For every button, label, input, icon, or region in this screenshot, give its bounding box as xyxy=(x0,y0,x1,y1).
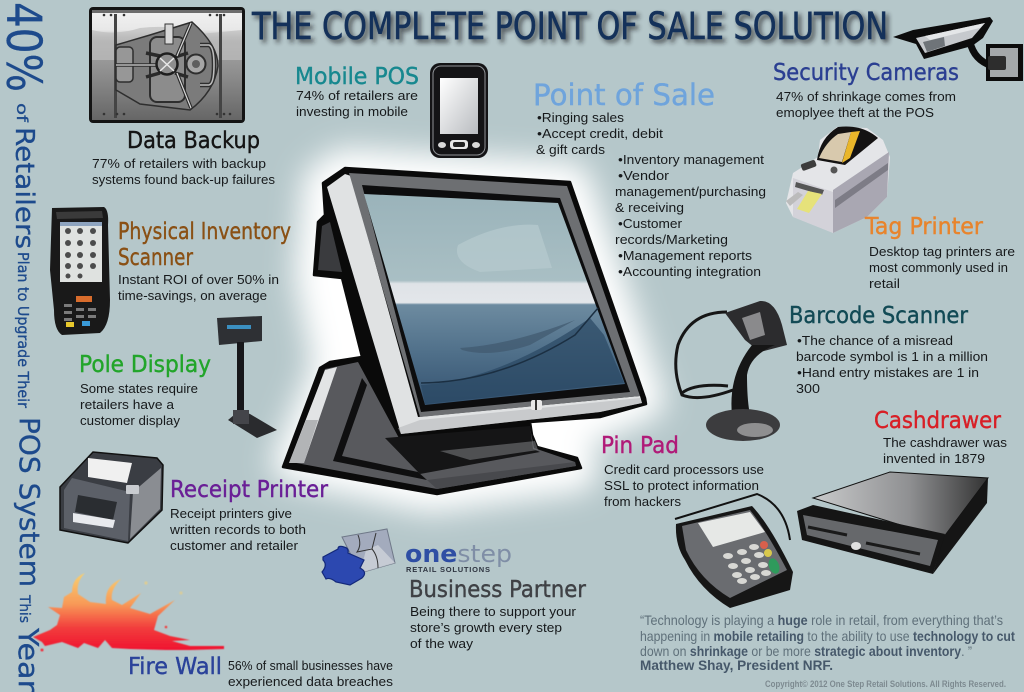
icon: bank vault xyxy=(89,7,245,123)
block: data backup: Data Backup xyxy=(127,128,260,154)
stand xyxy=(291,362,576,489)
block: tag printer: most commonly used in xyxy=(869,260,1008,275)
block: point of sale: Point of Sale xyxy=(533,78,715,112)
vertical headline xyxy=(0,2,51,692)
block: receipt printer: written records to both xyxy=(169,522,306,537)
block: pole display xyxy=(79,352,211,428)
block: data backup: 77% of retailers with backup xyxy=(92,156,266,171)
monitor glow xyxy=(292,168,645,493)
block: business partner: Business Partner xyxy=(409,577,586,603)
block: tag printer: Desktop tag printers are xyxy=(869,244,1015,259)
logo: one step puzzle: onestep xyxy=(405,540,512,568)
block: point of sale: •Customer xyxy=(618,216,683,231)
block: security cameras: 47% of shrinkage comes from xyxy=(776,89,956,104)
quote: Matthew Shay, President NRF. xyxy=(640,657,833,673)
block: point of sale: •Management reports xyxy=(618,248,753,263)
block: point of sale: •Vendor xyxy=(618,168,670,183)
block: barcode scanner xyxy=(789,303,988,396)
block: barcode scanner: 300 xyxy=(796,381,820,396)
block: barcode scanner: •Hand entry mistakes are 1 in xyxy=(797,365,979,380)
block: point of sale: records/Marketing xyxy=(615,232,728,247)
block: business partner xyxy=(409,577,586,651)
block: barcode scanner: •The chance of a misread xyxy=(797,333,953,348)
icon: fire splash xyxy=(33,573,224,652)
block: point of sale: •Inventory management xyxy=(618,152,764,167)
block: data backup: systems found back-up failures xyxy=(92,172,276,187)
bezel xyxy=(349,173,640,417)
block: tag printer: retail xyxy=(869,276,900,291)
quote: “Technology is playing a huge role in retail, from everything that’s xyxy=(640,612,1003,628)
vertical headline: of xyxy=(13,103,31,123)
vertical headline: Plan to Upgrade Their xyxy=(14,252,32,409)
block: receipt printer: Receipt printers give xyxy=(170,506,292,521)
block: pole display: retailers have a xyxy=(80,397,175,412)
block: security cameras: emoplyee theft at the POS xyxy=(776,105,934,120)
silver side xyxy=(327,174,642,434)
block: physical inventory scanner: Instant ROI of over 50% in xyxy=(118,272,279,287)
block: receipt printer: Receipt Printer xyxy=(170,477,328,503)
icon: pole display xyxy=(217,316,277,438)
icon: POS monitor xyxy=(283,168,646,494)
block: point of sale: •Ringing sales xyxy=(537,110,625,125)
block: receipt printer xyxy=(169,477,328,553)
block: point of sale: & receiving xyxy=(615,200,684,215)
block: business partner: Being there to support your xyxy=(410,604,577,619)
block: security cameras xyxy=(773,60,959,120)
block: fire wall: experienced data breaches xyxy=(228,674,394,689)
quote xyxy=(640,612,1015,673)
hp logo xyxy=(531,400,542,410)
block: mobile POS: Mobile POS xyxy=(295,64,419,90)
block: cashdrawer: invented in 1879 xyxy=(883,451,985,466)
block: pole display: Pole Display xyxy=(79,352,211,378)
block: cashdrawer: The cashdrawer was xyxy=(883,435,1008,450)
block: fire wall xyxy=(128,654,394,689)
quote: happening in mobile retailing to the ability to use technology to cut xyxy=(640,628,1015,644)
block: cashdrawer: Cashdrawer xyxy=(874,408,1002,434)
block: point of sale: •Accounting integration xyxy=(618,264,761,279)
block: tag printer xyxy=(864,214,1015,291)
block: physical inventory scanner: Physical Inventory xyxy=(118,219,291,245)
icon: cash drawer xyxy=(797,472,988,574)
block: pin pad: Pin Pad xyxy=(601,433,679,459)
block: pin pad: from hackers xyxy=(604,494,682,509)
block: fire wall: Fire Wall xyxy=(128,654,222,680)
block: point of sale: & gift cards xyxy=(536,142,606,157)
block: security cameras: Security Cameras xyxy=(773,60,959,86)
block: pole display: customer display xyxy=(80,413,181,428)
icon: security camera xyxy=(893,17,1023,81)
logo: one step puzzle: RETAIL SOLUTIONS xyxy=(406,565,490,574)
title: THE COMPLETE POINT OF SALE SOLUTION xyxy=(251,5,888,48)
quote: down on shrinkage or be more strategic about inventory. ” xyxy=(640,643,972,659)
vertical headline: Retailers xyxy=(9,127,39,249)
block: pin pad: Credit card processors use xyxy=(604,462,764,477)
block: mobile POS: investing in mobile xyxy=(296,104,408,119)
vertical headline: Year xyxy=(12,627,45,692)
block: physical inventory scanner xyxy=(118,219,291,303)
icon: physical inventory scanner xyxy=(50,207,110,335)
vertical headline: This xyxy=(16,594,32,623)
logo: one step puzzle xyxy=(322,529,512,585)
icon: barcode scanner xyxy=(676,301,787,441)
screen xyxy=(364,194,625,405)
block: point of sale: management/purchasing xyxy=(615,184,766,199)
title: THE COMPLETE POINT OF SALE SOLUTION xyxy=(254,8,891,51)
block: barcode scanner: barcode symbol is 1 in a million xyxy=(796,349,988,364)
block: tag printer: Tag Printer xyxy=(864,214,984,240)
icon: pin pad xyxy=(675,494,793,608)
block: mobile POS xyxy=(295,64,419,119)
block: receipt printer: customer and retailer xyxy=(170,538,299,553)
block: mobile POS: 74% of retailers are xyxy=(296,88,418,103)
block: pin pad xyxy=(601,433,764,509)
icon: mobile phone xyxy=(430,63,488,158)
block: business partner: store’s growth every step xyxy=(410,620,562,635)
block: physical inventory scanner: Scanner xyxy=(118,245,193,271)
block: pole display: Some states require xyxy=(80,381,198,396)
block: physical inventory scanner: time-savings, on average xyxy=(118,288,267,303)
block: pin pad: SSL to protect information xyxy=(604,478,759,493)
block: cashdrawer xyxy=(874,408,1008,466)
block: point of sale: •Accept credit, debit xyxy=(537,126,663,141)
block: barcode scanner: Barcode Scanner xyxy=(789,303,968,329)
block: fire wall: 56% of small businesses have xyxy=(228,658,393,673)
block: business partner: of the way xyxy=(410,636,474,651)
block: point of sale xyxy=(533,78,766,279)
icon: receipt printer xyxy=(60,452,163,543)
icon: tag printer xyxy=(786,126,890,233)
block: data backup xyxy=(92,128,276,187)
vertical headline: POS System xyxy=(13,417,46,587)
